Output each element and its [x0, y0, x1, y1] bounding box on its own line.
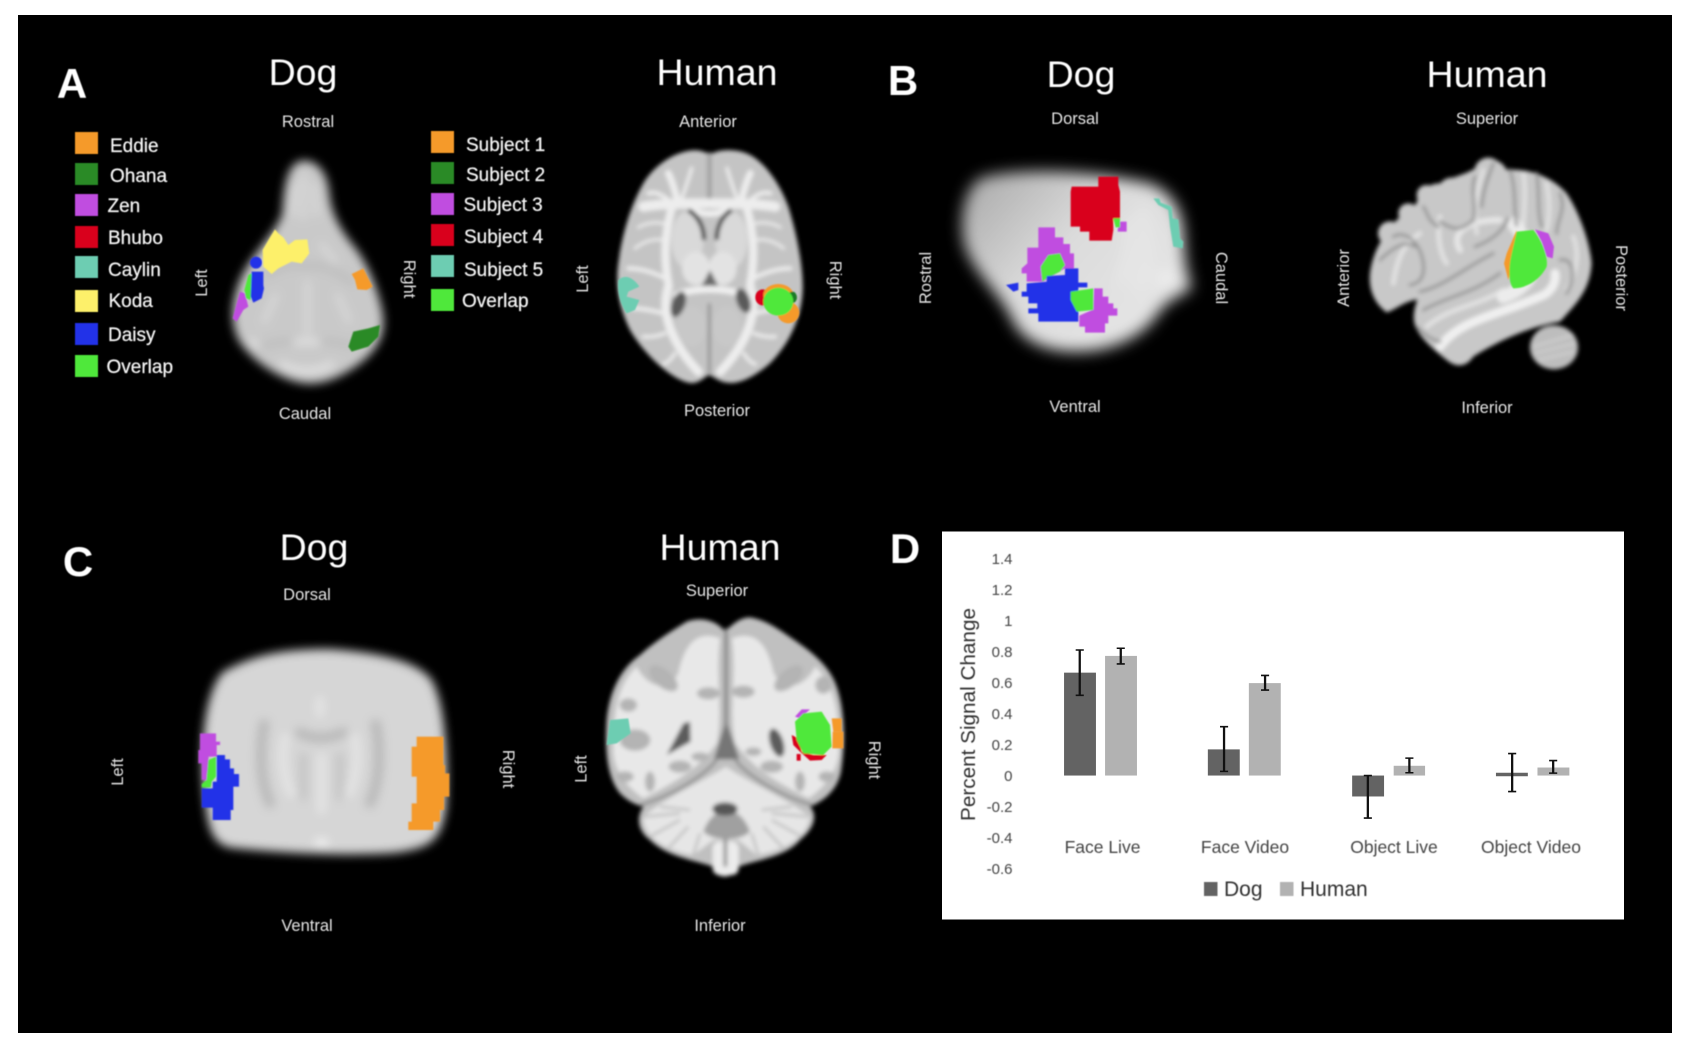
orientation labels, human: Posterior [684, 402, 751, 420]
orientation labels, human: Inferior [694, 917, 746, 935]
orientation labels, dog: Rostral [282, 113, 334, 131]
y axis tick labels: 0.2 [992, 737, 1012, 754]
orientation labels, dog: Left [109, 758, 127, 786]
orientation labels, human [572, 582, 883, 935]
legend: dogs: Ohana [110, 166, 167, 187]
y axis tick labels: -0.2 [987, 799, 1012, 816]
legend: human subjects: Subject 2 [466, 165, 545, 186]
heading: Dog: Dog [269, 51, 337, 93]
brain: human coronal [606, 617, 844, 877]
heading: Human: Human [657, 51, 777, 93]
legend: dogs: Eddie [110, 136, 159, 157]
panel letter C: C [63, 538, 93, 585]
panel C: coronal view, dog and human [63, 526, 883, 935]
bars: face live [1064, 648, 1137, 776]
brain: dog sagittal [962, 171, 1192, 352]
orientation labels, dog: Caudal [1212, 252, 1230, 304]
legend: human subjects: Subject 5 [464, 260, 543, 281]
orientation labels, dog: Dorsal [283, 586, 331, 604]
heading: Dog: Dog [1047, 53, 1115, 95]
legend: dogs: Caylin [108, 260, 161, 281]
panel letter A: A [57, 60, 87, 107]
bars: object live [1352, 758, 1425, 818]
legend: human subjects: Overlap [462, 291, 529, 312]
legend: dogs: Overlap [106, 357, 173, 378]
y axis tick labels: 0.8 [992, 644, 1012, 661]
orientation labels, dog: Caudal [279, 405, 331, 423]
brain: dog axial [233, 161, 383, 384]
orientation labels, human: Left [572, 755, 590, 783]
y axis tick labels: -0.4 [987, 830, 1012, 847]
bars with error bars [1064, 648, 1569, 818]
orientation labels, dog [193, 113, 418, 423]
category labels: Object Video [1481, 837, 1581, 857]
orientation labels, dog: Left [193, 269, 211, 297]
orientation labels, human: Posterior [1612, 245, 1630, 312]
heading: Human: Human [660, 526, 780, 568]
orientation labels, dog: Right [400, 260, 418, 299]
y axis tick labels: 0.6 [992, 675, 1012, 692]
orientation labels, human [1335, 110, 1630, 417]
orientation labels, human: Anterior [679, 113, 737, 131]
category labels: Object Live [1350, 837, 1438, 857]
legend: dogs: Koda [108, 291, 153, 312]
orientation labels, dog [917, 110, 1230, 416]
legend: human subjects: Subject 4 [464, 227, 544, 248]
chart legend [1204, 878, 1368, 901]
panel letter B: B [888, 57, 918, 104]
orientation labels, human: Inferior [1461, 399, 1513, 417]
y axis tick labels: 1.2 [992, 582, 1012, 599]
y axis tick labels [987, 551, 1012, 878]
legend: dogs: Bhubo [108, 228, 163, 249]
heading: Dog: Dog [280, 526, 348, 568]
orientation labels, human: Left [574, 265, 592, 293]
legend: dogs: Daisy [108, 325, 156, 346]
legend: human subjects: Subject 1 [466, 135, 545, 156]
category labels: Face Video [1201, 837, 1289, 857]
orientation labels, human: Anterior [1335, 249, 1353, 307]
chart legend: Dog [1224, 878, 1263, 901]
orientation labels, dog: Right [499, 750, 517, 789]
orientation labels, human: Right [865, 741, 883, 780]
orientation labels, human: Superior [686, 582, 749, 600]
orientation labels, dog: Ventral [1049, 398, 1101, 416]
chart background [942, 532, 1624, 920]
y axis tick labels: 1 [1004, 613, 1012, 630]
orientation labels, human [574, 113, 844, 420]
legend: dogs: Zen [108, 196, 140, 217]
orientation labels, dog [109, 586, 517, 935]
chart legend: Human [1300, 878, 1368, 901]
category labels [1065, 837, 1581, 857]
orientation labels, dog: Ventral [281, 917, 333, 935]
orientation labels, dog: Dorsal [1051, 110, 1099, 128]
orientation labels, dog: Rostral [917, 252, 935, 304]
panel B: sagittal view, dog and human [888, 53, 1630, 417]
orientation labels, human: Superior [1456, 110, 1519, 128]
y axis tick labels: 0 [1004, 768, 1012, 785]
heading: Human: Human [1427, 53, 1547, 95]
panel A: dorsal view, dog and human [57, 51, 844, 423]
y axis tick labels: 0.4 [992, 706, 1012, 723]
brain: dog coronal [198, 649, 449, 854]
panel letter D: D [890, 525, 920, 572]
brain: human sagittal [1370, 158, 1592, 369]
legend: dogs [75, 132, 173, 378]
y axis title: Percent Signal Change [958, 608, 980, 821]
bars: object video [1496, 754, 1569, 792]
brain: human axial [617, 150, 803, 383]
category labels: Face Live [1065, 837, 1140, 857]
orientation labels, human: Right [826, 261, 844, 300]
legend: human subjects [431, 131, 545, 312]
y axis tick labels: -0.6 [987, 861, 1012, 878]
bars: face video [1208, 675, 1281, 776]
y axis tick labels: 1.4 [992, 551, 1012, 568]
legend: human subjects: Subject 3 [464, 195, 543, 216]
panel D: bar chart of percent signal change [890, 525, 1624, 920]
